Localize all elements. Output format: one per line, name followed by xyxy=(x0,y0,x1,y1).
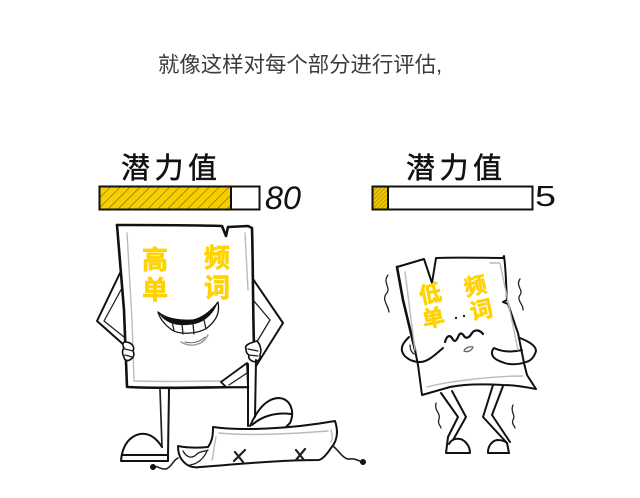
fallen torn piece xyxy=(150,421,366,470)
heading: low potential value: 潜力值 xyxy=(406,145,502,187)
paper body xyxy=(397,256,536,395)
hands xyxy=(122,341,261,362)
character: low frequency word: 词 xyxy=(467,291,495,327)
shake marks xyxy=(385,275,523,428)
progress bar: 5 xyxy=(372,186,532,210)
progress bar: 80 xyxy=(100,186,260,210)
arms xyxy=(97,273,283,366)
character: high frequency word: 词 xyxy=(204,268,230,305)
worried face xyxy=(445,315,483,352)
value: 5: 5 xyxy=(535,181,556,213)
character: low frequency word xyxy=(385,256,536,453)
folded corner xyxy=(221,363,248,387)
legs and shoes xyxy=(441,385,510,453)
character: low frequency word: 单 xyxy=(419,299,447,335)
label: frequency word: 频 xyxy=(204,238,230,275)
heading: high potential value: 潜力值 xyxy=(121,145,217,187)
label: low: 低 xyxy=(416,275,444,311)
paper body xyxy=(117,225,254,345)
arms behind paper xyxy=(402,337,536,364)
panel: low potential xyxy=(372,145,556,453)
title: 就像这样对每个部分进行评估, xyxy=(158,53,442,77)
smile xyxy=(158,302,219,345)
value: 80: 80 xyxy=(265,180,301,216)
legs and shoes xyxy=(121,360,292,461)
character: high frequency word: 单 xyxy=(142,270,168,307)
panel: high potential xyxy=(97,145,366,470)
label: high: 高 xyxy=(142,240,168,277)
character: high frequency word xyxy=(97,225,366,470)
label: frequency word: 频 xyxy=(461,267,489,303)
